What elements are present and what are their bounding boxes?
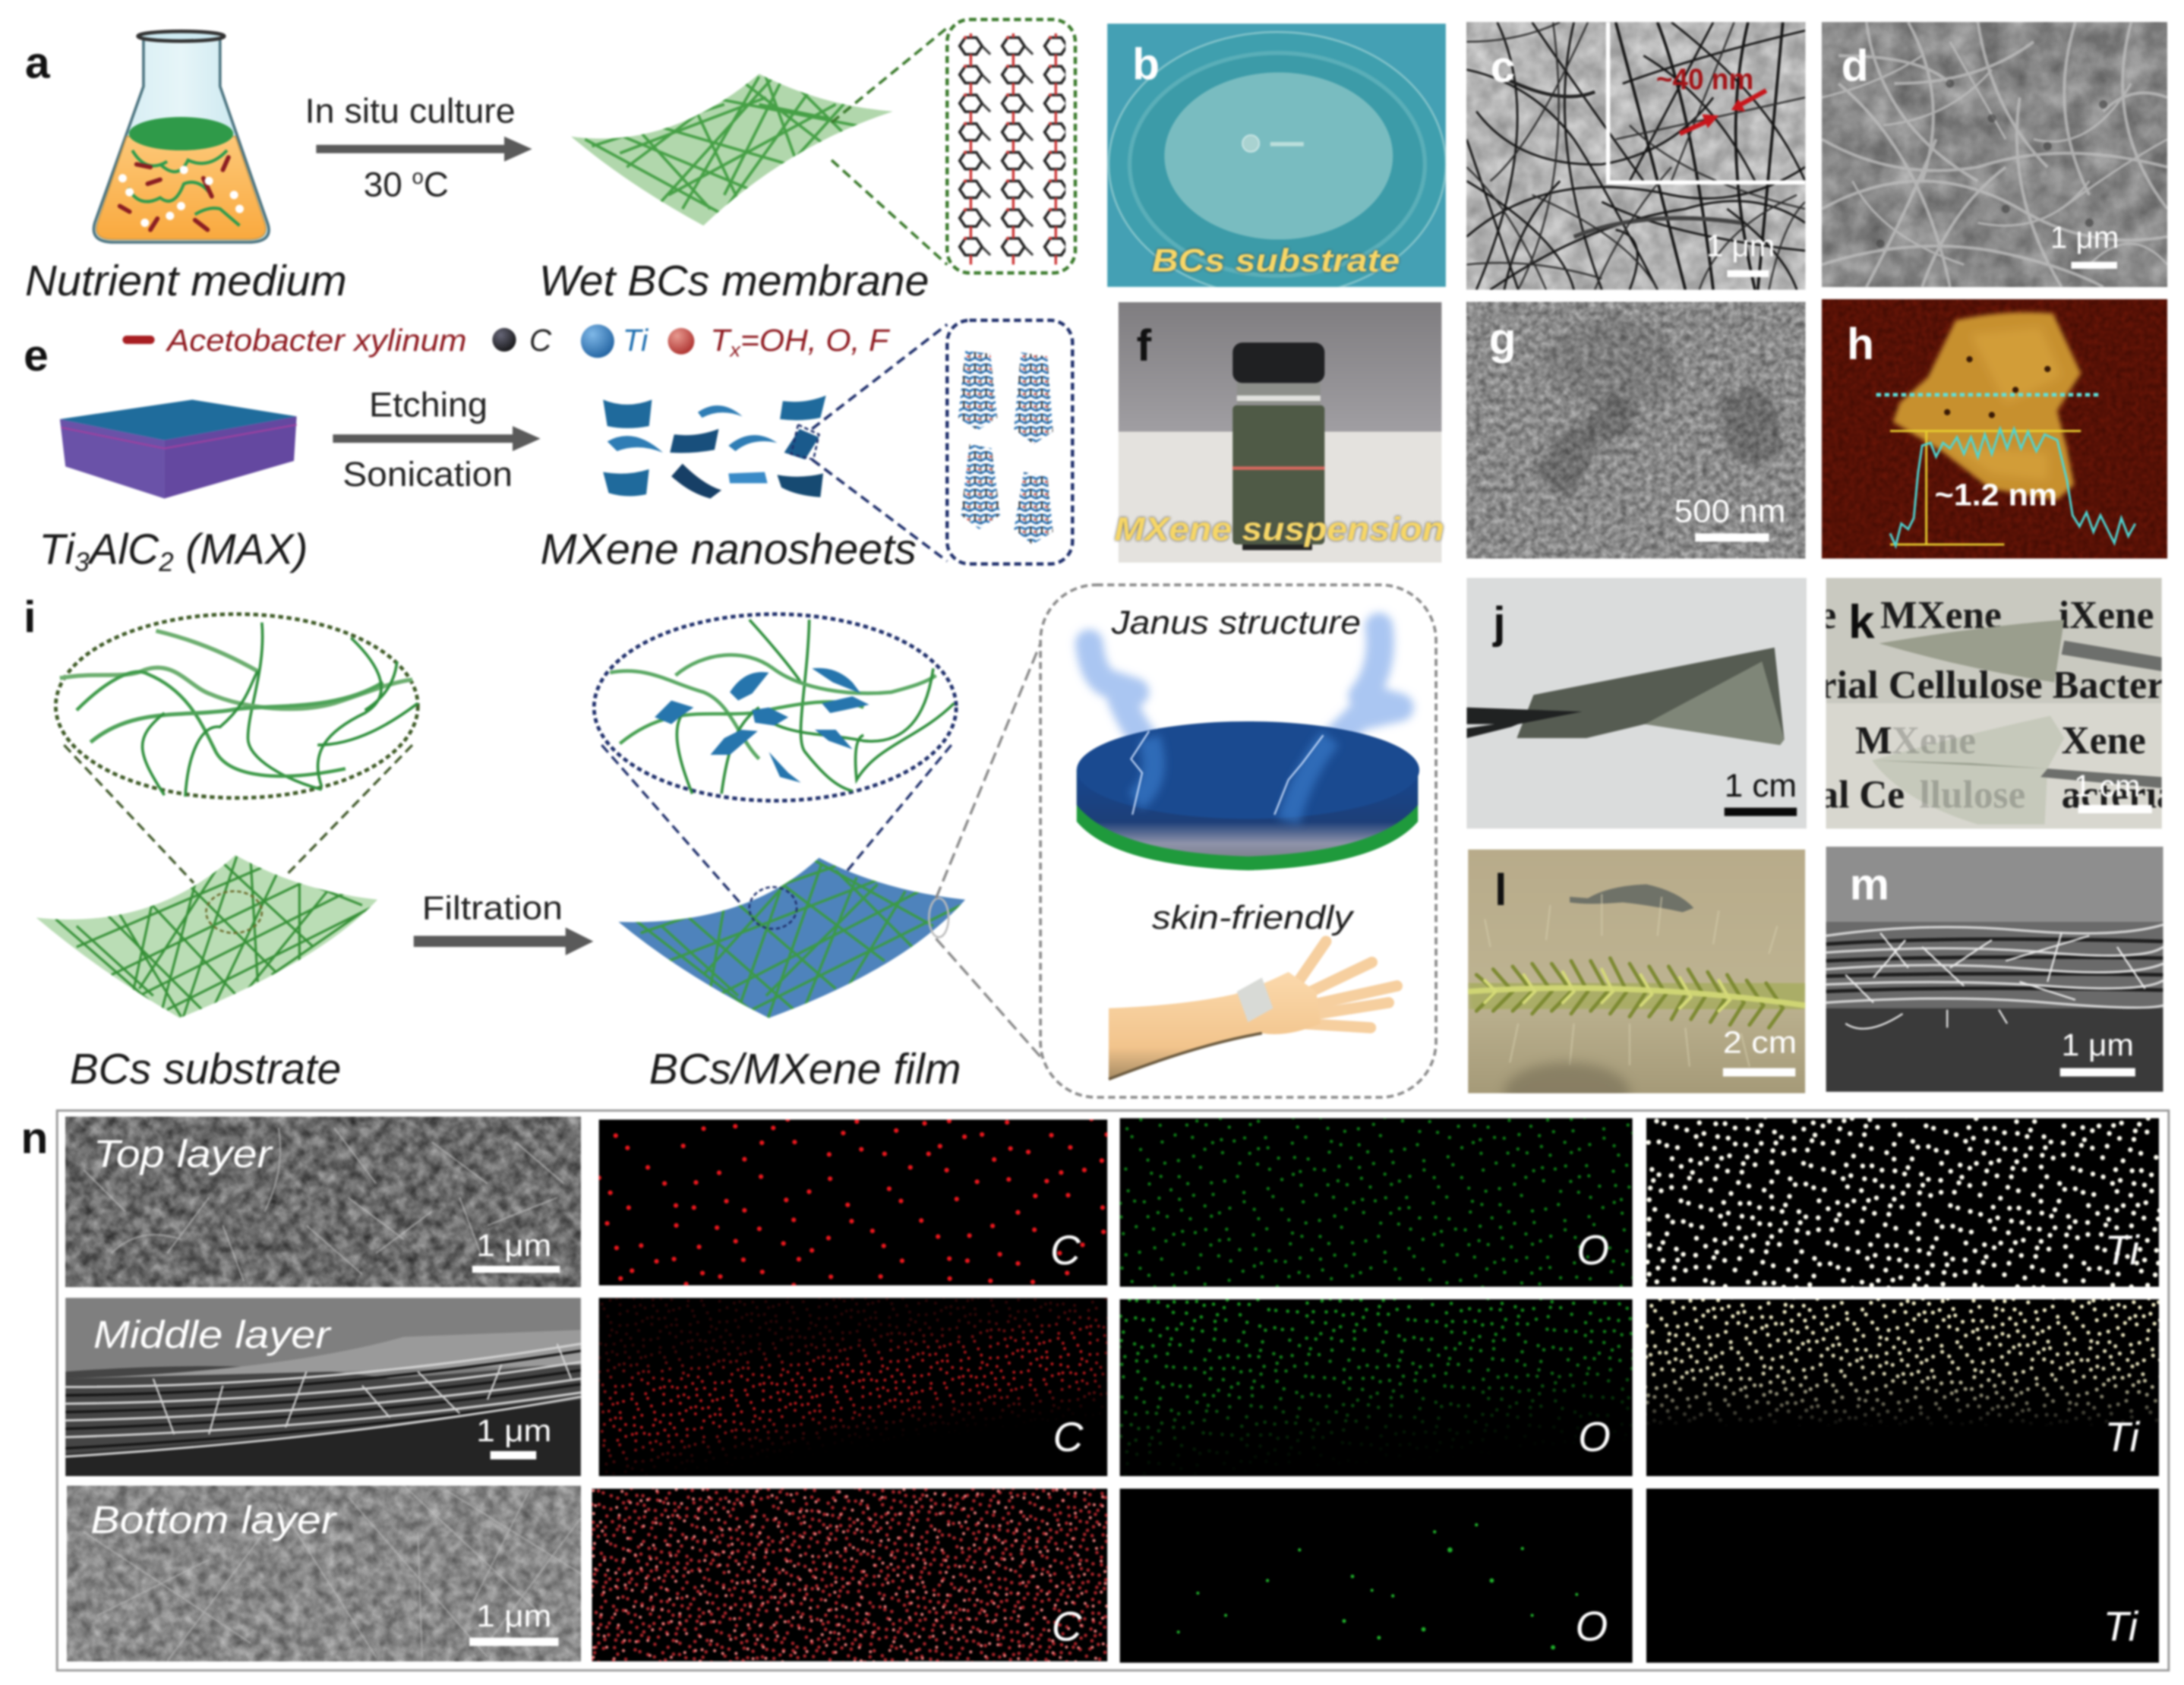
- SEM middle layer: [65, 1298, 581, 1476]
- panel f: MXene suspension photo: [1114, 302, 1444, 563]
- panel n: elemental mapping: [21, 1111, 2169, 1671]
- icon: culture flask: [93, 31, 269, 242]
- photo caption: MXene suspension: [1114, 511, 1444, 548]
- map Ti middle: [1646, 1299, 2159, 1476]
- fibre pits: [1880, 84, 2104, 244]
- panel k: translucent film over text photo: llulose: [1920, 774, 2025, 817]
- photo caption: BCs substrate: [1152, 243, 1400, 279]
- map O bottom: O: [1575, 1602, 1608, 1649]
- legend: acetobacter xylinum: Acetobacter xylinum: [166, 323, 466, 358]
- scale bar: 1 μm: [2050, 219, 2119, 254]
- panel i: film filtration scheme: [24, 585, 1436, 1097]
- inset: MXene atomic structure: [947, 320, 1072, 564]
- map Ti top: [1646, 1119, 2159, 1287]
- magnified BC/MXene network: [594, 614, 956, 800]
- caption: nutrient medium: Nutrient medium: [25, 257, 347, 305]
- printed background text: rial Cellulose Bacter: [1819, 664, 2164, 707]
- caption: Ti3AlC2 (MAX): (MAX): [174, 526, 308, 574]
- zoom lines to Janus box: [936, 643, 1042, 1059]
- scale bar: 1 μm: [1706, 228, 1775, 263]
- caption: Ti3AlC2 (MAX): Ti: [39, 526, 74, 574]
- bristlegrass spike: [1468, 894, 1805, 1067]
- annotation: ~40 nm: [1656, 63, 1766, 134]
- printed background text: M: [1855, 719, 1892, 762]
- map O bottom: [1120, 1488, 1633, 1663]
- text: Janus structure: Janus structure: [1111, 604, 1361, 641]
- printed background text: al Ce: [1819, 774, 1905, 817]
- panel a: in situ culture scheme: [25, 20, 1075, 305]
- scale bar: [2074, 768, 2152, 813]
- legend: carbon: C: [529, 323, 552, 358]
- film leaf: [1570, 885, 1693, 912]
- text: in situ culture: In situ culture: [305, 90, 516, 130]
- height markers: [1890, 431, 2081, 544]
- scale bar: 2 cm: [1723, 1024, 1797, 1059]
- row: middle layer: [65, 1298, 2159, 1476]
- film lower: [1872, 716, 2064, 825]
- SEM bottom layer: [67, 1486, 581, 1661]
- caption: BCs substrate: BCs substrate: [70, 1046, 341, 1093]
- legend: titanium: Ti: [623, 323, 649, 358]
- map Ti top: Ti: [2104, 1226, 2141, 1273]
- map C bottom: [592, 1488, 1107, 1661]
- annotation: ~40 nm: ~40 nm: [1656, 63, 1753, 96]
- height label: ~1.2 nm: [1935, 478, 2057, 513]
- MAX phase block: [60, 399, 297, 499]
- map C middle: C: [1053, 1413, 1084, 1460]
- panel m: cross-section SEM: [1826, 847, 2163, 1092]
- zoom cone to BC circle: [64, 745, 412, 883]
- map C bottom: C: [1052, 1602, 1083, 1649]
- SEM top layer: [65, 1117, 581, 1287]
- legend: species: [122, 323, 891, 361]
- SEM top layer: Top layer: [93, 1132, 273, 1175]
- map C middle: [599, 1298, 1107, 1476]
- panel d: SEM image of BC fibres: [1822, 22, 2167, 287]
- printed background text: acteria: [2062, 774, 2176, 817]
- printed background text: MXene: [1880, 594, 2002, 637]
- caption: wet BCs membrane: Wet BCs membrane: [539, 257, 929, 305]
- arrow: culture: [316, 137, 532, 162]
- panel n frame: [57, 1111, 2169, 1671]
- row: top layer: [65, 1117, 2159, 1287]
- height profile: [1890, 429, 2135, 546]
- scale bar: 1 μm: [2062, 1027, 2134, 1062]
- inset: cellulose molecular chains: [947, 20, 1075, 273]
- panel b: BCs substrate photo: [1107, 24, 1446, 297]
- row: bottom layer: [67, 1486, 2159, 1663]
- map O top: O: [1576, 1226, 1609, 1273]
- film upper: [1879, 620, 2064, 683]
- scale bar: [2060, 1027, 2135, 1077]
- printed background text: Xene: [2062, 719, 2146, 762]
- printed background text: iXene: [2059, 594, 2154, 637]
- map O middle: [1120, 1299, 1633, 1476]
- caption: MXene nanosheets: MXene nanosheets: [541, 526, 917, 574]
- panel l: lightweight film on bristlegrass photo: [1468, 850, 1805, 1124]
- text: sonication: Sonication: [342, 454, 513, 494]
- panel k: translucent film over text photo: [1819, 578, 2176, 828]
- scale bar: 1 cm: [2074, 768, 2141, 803]
- map Ti middle: Ti: [2104, 1413, 2141, 1460]
- caption: Ti3AlC2 (MAX): 2: [158, 547, 174, 577]
- caption: BCs/MXene film: BCs/MXene film: [649, 1046, 961, 1093]
- panel label e: e: [24, 331, 49, 380]
- text: etching: Etching: [369, 384, 488, 424]
- panel k: translucent film over text photo: Xene: [1892, 719, 1976, 762]
- SEM top layer: 1 μm: [476, 1228, 551, 1263]
- printed background text: [1824, 599, 2163, 809]
- panel label d: d: [1842, 41, 1869, 90]
- panel label j: j: [1492, 598, 1506, 648]
- map C top: [599, 1119, 1107, 1286]
- wet BCs membrane illustration: [571, 70, 893, 230]
- MXene nanosheets illustration: [603, 396, 826, 499]
- SEM middle layer: Middle layer: [93, 1313, 332, 1356]
- map O top: [1120, 1119, 1633, 1287]
- scale bar: 1 cm: [1725, 768, 1797, 803]
- legend: terminations: =OH, O, F: [740, 323, 891, 358]
- Janus disk: [1077, 721, 1419, 870]
- caption: Ti3AlC2 (MAX): AlC: [87, 526, 159, 574]
- SEM bottom layer: Bottom layer: [90, 1498, 337, 1541]
- callout: Janus structure and skin-friendly: [1040, 585, 1436, 1097]
- panel e: MXene preparation scheme: [24, 320, 1072, 577]
- legend: terminations: x: [728, 339, 741, 361]
- SEM middle layer: 1 μm: [476, 1413, 551, 1448]
- panel c: TEM image of BC fibres: [1466, 22, 1805, 289]
- legend: terminations: T: [710, 323, 729, 358]
- map O middle: O: [1578, 1413, 1611, 1460]
- BCs/MXene film: [618, 858, 965, 1024]
- SEM bottom layer: 1 μm: [476, 1598, 551, 1633]
- map Ti bottom: [1646, 1488, 2159, 1663]
- caption: Ti3AlC2 (MAX): 3: [74, 547, 90, 577]
- inset frame: [1608, 22, 1805, 182]
- dashed zoom lines to MXene inset: [791, 324, 947, 561]
- panel label c: c: [1491, 43, 1515, 92]
- dashed zoom lines to molecule inset: [832, 28, 947, 264]
- icon: lightning glow: [1089, 626, 1400, 745]
- text: 30 °C: 30: [364, 165, 402, 204]
- profile line: [1876, 394, 2099, 396]
- arrow: etching and sonication: [333, 426, 541, 451]
- printed background text: e: [1819, 594, 1836, 637]
- panel label f: f: [1137, 321, 1152, 371]
- panel label h: h: [1847, 320, 1874, 369]
- text: 30 °C: C: [424, 165, 449, 204]
- panel g: TEM of MXene flakes: [1466, 302, 1805, 558]
- text: skin-friendly: skin-friendly: [1152, 899, 1355, 936]
- BC substrate membrane: [36, 855, 377, 1024]
- legend: carbon: [492, 323, 552, 358]
- magnified BC fibre network: [55, 614, 418, 798]
- panel label n: n: [21, 1113, 48, 1163]
- icon: arm with patch: [1109, 942, 1397, 1079]
- map C top: C: [1050, 1226, 1081, 1273]
- panel label b: b: [1132, 40, 1160, 90]
- text: filtration: Filtration: [422, 889, 563, 926]
- legend: terminations: [668, 323, 891, 361]
- panel label a: a: [25, 39, 50, 88]
- zoom cone to MXene circle: [601, 745, 952, 915]
- panel h: AFM of MXene flake: [1822, 299, 2167, 558]
- panel label k: k: [1848, 596, 1875, 648]
- legend: titanium: [581, 323, 649, 358]
- panel j: flexible film photo: [1466, 578, 1807, 828]
- map Ti bottom: Ti: [2104, 1602, 2139, 1649]
- scale bar: [1723, 1024, 1797, 1077]
- panel label i: i: [24, 593, 36, 642]
- arrow: filtration: [414, 927, 593, 955]
- panel label g: g: [1489, 314, 1516, 364]
- scale bar: 500 nm: [1674, 494, 1785, 529]
- panel label m: m: [1850, 860, 1889, 910]
- text: 30 °C: o: [412, 165, 424, 188]
- panel label l: l: [1494, 866, 1507, 915]
- vial: [1232, 342, 1324, 550]
